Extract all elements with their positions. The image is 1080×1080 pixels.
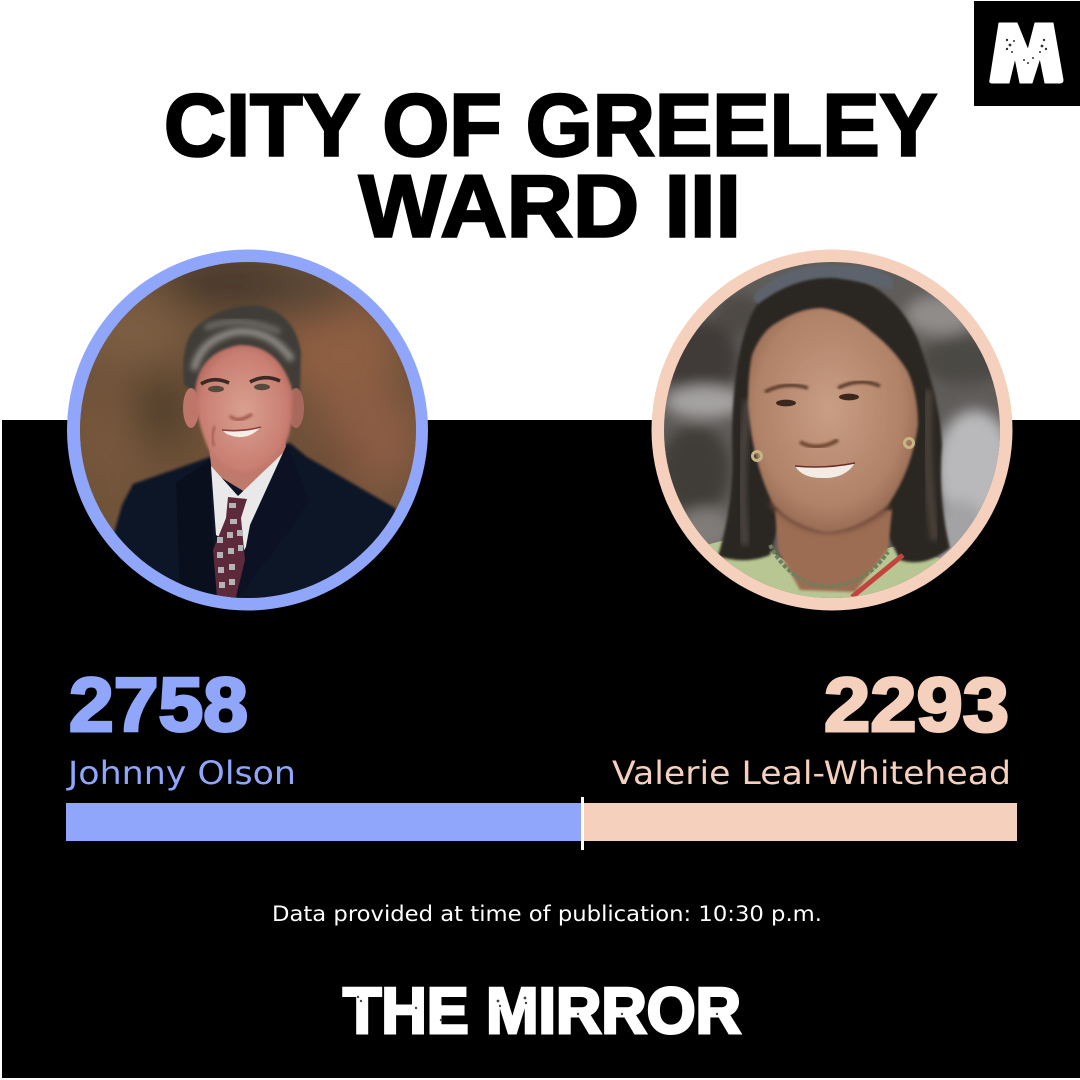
photo: woman smiling xyxy=(660,260,1015,610)
face xyxy=(195,345,293,477)
earrings xyxy=(752,438,914,460)
tie xyxy=(213,497,247,597)
portrait ring: peach xyxy=(652,250,1012,610)
sunglasses xyxy=(753,264,893,304)
vote count: Johnny Olson: 2758 xyxy=(69,663,248,748)
nose and mouth xyxy=(795,440,855,478)
vote count: Valerie Leal-Whitehead: 2293 xyxy=(824,663,1009,748)
bar midpoint divider xyxy=(581,797,584,850)
ears xyxy=(183,388,199,428)
black lower panel xyxy=(2,420,1080,1078)
hair xyxy=(183,306,301,395)
neck xyxy=(775,510,892,592)
lapels xyxy=(176,460,217,600)
bar segment: Leal-Whitehead xyxy=(582,803,1017,841)
hair xyxy=(718,272,950,562)
shirt xyxy=(709,540,940,598)
portrait ring: blue xyxy=(67,250,428,610)
neck xyxy=(208,440,288,492)
shirt collar xyxy=(211,453,283,550)
bar segment: Olson xyxy=(66,803,582,841)
photo: man in suit xyxy=(80,262,416,598)
eyes and brows xyxy=(765,382,880,406)
data note: Data provided at time of publication: 10:30 p.m. xyxy=(272,902,822,926)
face xyxy=(748,308,918,532)
logo: M badge xyxy=(974,1,1080,106)
candidate name: Johnny Olson: Johnny Olson xyxy=(66,754,296,792)
nose and mouth xyxy=(212,414,261,446)
portrait: Johnny Olson xyxy=(67,250,430,610)
candidate name: Valerie Leal-Whitehead: Valerie Leal-Whitehead xyxy=(612,754,1011,792)
portrait: Valerie Leal-Whitehead xyxy=(652,250,1015,610)
title: CITY OF GREELEY xyxy=(164,76,937,174)
vote share bar xyxy=(66,797,1017,850)
eyes and brows xyxy=(201,378,280,392)
suit xyxy=(113,442,396,598)
wordmark: The Mirror: THE MIRROR xyxy=(343,974,741,1047)
title xyxy=(164,76,937,256)
title: WARD III xyxy=(359,156,741,256)
necklace xyxy=(770,545,888,586)
red strap xyxy=(852,555,903,597)
